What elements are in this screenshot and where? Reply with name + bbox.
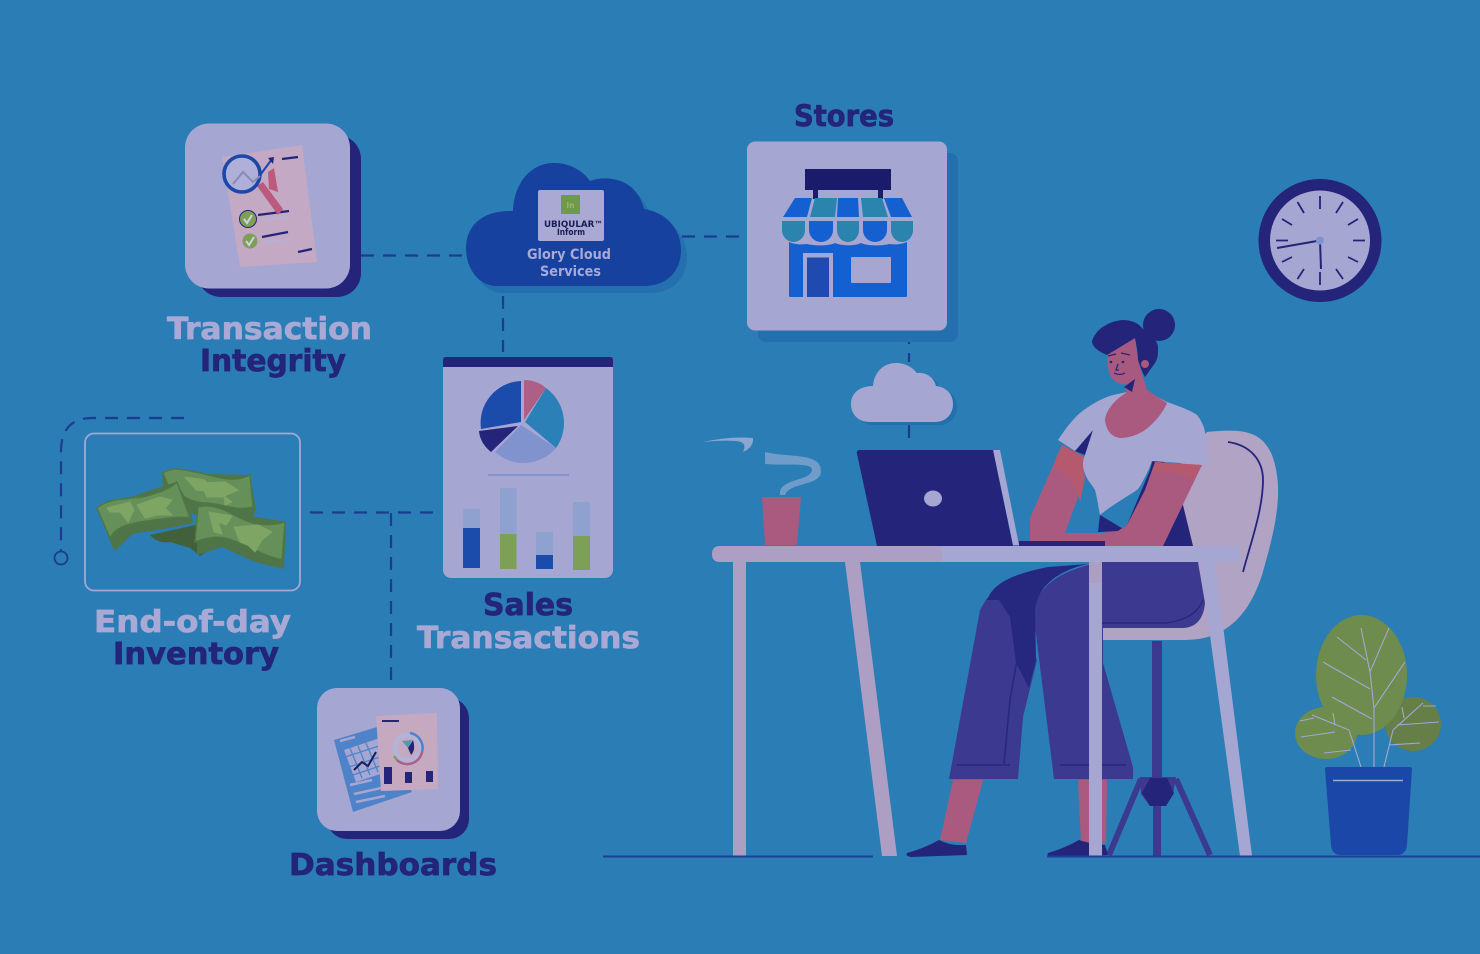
label: End-of-day Inventory: End-of-day xyxy=(94,605,291,640)
label: End-of-day Inventory xyxy=(94,605,291,672)
panel: end-of-day inventory box xyxy=(85,434,300,590)
floor line xyxy=(603,856,1480,858)
chair back and seat xyxy=(1102,431,1278,640)
icon: audit document with magnifier xyxy=(222,145,317,267)
legs and shoes xyxy=(906,780,1108,857)
arm: right xyxy=(1102,462,1202,546)
trousers: near leg and thigh xyxy=(1033,562,1205,779)
icon: wall clock xyxy=(1258,179,1382,302)
face xyxy=(1107,338,1143,392)
center dark shadow xyxy=(150,525,225,556)
label: Transaction Integrity xyxy=(167,312,372,379)
figure: seated woman xyxy=(906,309,1210,857)
panel: transaction integrity card xyxy=(185,124,361,297)
icon: storefront xyxy=(780,169,916,297)
potted plant xyxy=(1295,615,1441,855)
pot xyxy=(1325,767,1412,855)
t-shirt xyxy=(1058,392,1210,515)
label: Sales Transactions xyxy=(417,588,640,656)
top bill xyxy=(162,469,256,522)
neck and chest skin xyxy=(1105,377,1167,438)
arm: left xyxy=(1030,445,1105,546)
desk xyxy=(712,546,1252,856)
left bill xyxy=(97,482,193,551)
cloud caption: Services xyxy=(540,264,601,280)
chair stem and base xyxy=(1109,641,1210,856)
pie chart xyxy=(479,380,564,463)
label: Transaction Integrity: Integrity xyxy=(200,344,346,379)
cloud caption: Glory Cloud xyxy=(527,247,611,263)
logo tile: Ubiqular Inform: In xyxy=(566,201,575,210)
icon: laptop xyxy=(857,450,1105,546)
icon: small cloud xyxy=(851,363,957,425)
label: Dashboards: Dashboards xyxy=(289,848,497,883)
panel: dashboards card xyxy=(317,688,469,839)
logo tile: Ubiqular Inform xyxy=(538,190,604,241)
label: Sales Transactions: Sales xyxy=(483,588,573,623)
panel: stores card xyxy=(747,142,958,342)
icon: stack of banknotes xyxy=(97,469,286,569)
cloud caption xyxy=(527,247,611,280)
label: Sales Transactions: Transactions xyxy=(417,621,640,656)
loop end marker circle xyxy=(54,552,68,564)
logo tile: Ubiqular Inform: Inform xyxy=(557,228,585,238)
torso dark top xyxy=(1098,445,1193,546)
label: End-of-day Inventory: Inventory xyxy=(113,637,279,672)
dark sliver under sleeve xyxy=(1075,430,1093,455)
hair and bun xyxy=(1092,309,1175,377)
icon: dashboard papers xyxy=(334,713,438,812)
trousers: shaded inner thigh xyxy=(987,564,1088,688)
dashed connectors xyxy=(61,236,909,684)
leaves xyxy=(1295,615,1441,767)
logo tile: Ubiqular Inform: UBIQULAR™ xyxy=(544,220,603,230)
right bill xyxy=(195,506,286,569)
label: Stores: Stores xyxy=(794,99,894,133)
label: Transaction Integrity: Transaction xyxy=(167,312,372,347)
trousers: far leg xyxy=(949,590,1037,779)
bar chart xyxy=(463,488,590,570)
panel: sales transactions report xyxy=(443,357,613,578)
panel: Glory Cloud Services cloud xyxy=(466,163,687,293)
icon: coffee cup with steam xyxy=(703,438,821,545)
